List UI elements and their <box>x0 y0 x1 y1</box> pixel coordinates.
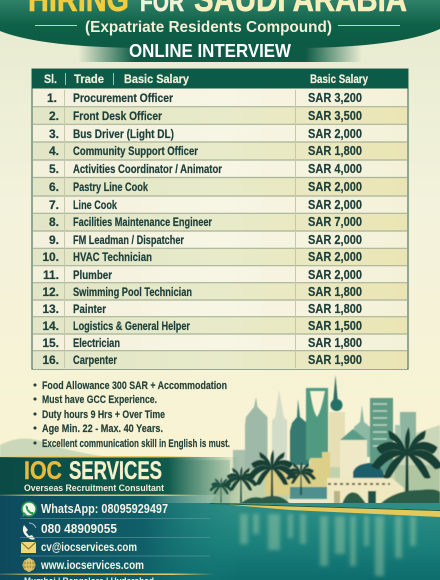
row 12 <box>42 284 362 299</box>
row 14 <box>42 318 362 333</box>
row 9 <box>49 232 362 247</box>
email row: cv@iocservices.com <box>41 540 137 554</box>
table header: Sl. <box>44 72 57 86</box>
row 8: 8. <box>49 215 59 229</box>
hazy hills <box>0 425 440 505</box>
row 16: Carpenter <box>73 353 117 367</box>
skyline illustration <box>0 375 440 510</box>
row 11: Plumber <box>73 268 112 282</box>
row 14: Logistics & General Helper <box>73 319 190 333</box>
yellow building <box>265 452 330 495</box>
requirement: duty hours: Duty hours 9 Hrs + Over Time <box>42 409 165 421</box>
row 5 <box>49 161 362 176</box>
company name <box>24 457 164 493</box>
row 15 <box>42 335 362 350</box>
row 14: 14. <box>42 319 59 333</box>
row 12: 12. <box>42 285 59 299</box>
palm trees <box>209 427 440 505</box>
row 3 <box>49 126 362 141</box>
bushes <box>240 489 440 506</box>
row 5: Activities Coordinator / Animator <box>73 162 222 176</box>
requirements list <box>34 380 230 450</box>
row 13: 13. <box>42 302 59 316</box>
row 5: 5. <box>49 162 59 176</box>
salary table <box>32 69 408 369</box>
row 6: Pastry Line Cook <box>73 180 148 194</box>
minaret tower <box>329 375 345 467</box>
company name: IOC <box>24 457 62 485</box>
row 16: 16. <box>42 353 59 367</box>
row 10: 10. <box>42 250 59 264</box>
row 6: SAR 2,000 <box>308 179 362 194</box>
table header <box>32 69 408 88</box>
right towers <box>354 398 416 473</box>
row 2: 2. <box>49 109 59 123</box>
row 10: SAR 2,000 <box>308 249 362 264</box>
requirement: english: Excellent communication skill in English is must. <box>42 438 230 450</box>
row 16 <box>42 352 362 367</box>
row 13 <box>42 301 362 316</box>
row 6 <box>49 179 362 194</box>
row 9: SAR 2,000 <box>308 232 362 247</box>
requirement: age: Age Min. 22 - Max. 40 Years. <box>42 423 163 435</box>
table header: Basic Salary <box>310 72 368 86</box>
row 11: 11. <box>43 268 59 282</box>
row 7 <box>49 197 362 212</box>
table header: Trade <box>74 72 104 86</box>
kingdom centre tower <box>306 388 328 460</box>
row 10: HVAC Technician <box>73 250 152 264</box>
row 2: SAR 3,500 <box>308 108 362 123</box>
row 4: Community Support Officer <box>73 144 198 158</box>
row 3: Bus Driver (Light DL) <box>73 127 174 141</box>
row 7: 7. <box>49 198 59 212</box>
row 4: SAR 1,800 <box>308 143 362 158</box>
company name: Overseas Recruitment Consultant <box>24 483 164 493</box>
domed building <box>340 429 367 480</box>
mosque <box>288 463 404 505</box>
row 6: 6. <box>49 180 59 194</box>
row 1: Procurement Officer <box>73 91 173 105</box>
row 12: Swimming Pool Technician <box>73 285 192 299</box>
row 9: FM Leadman / Dispatcher <box>73 233 184 247</box>
row 7: SAR 2,000 <box>308 197 362 212</box>
row 13: SAR 1,800 <box>308 301 362 316</box>
row 1: SAR 3,200 <box>308 90 362 105</box>
row 3: 3. <box>49 127 59 141</box>
online interview band <box>78 41 362 62</box>
row 2 <box>49 108 362 123</box>
row 10 <box>42 249 362 264</box>
whatsapp row: WhatsApp: 08095929497 <box>41 501 168 516</box>
company name: SERVICES <box>69 457 162 485</box>
requirement: food allowance: Food Allowance 300 SAR + Accommodation <box>42 380 227 392</box>
online interview band: ONLINE INTERVIEW <box>129 41 291 61</box>
row 4: 4. <box>49 144 59 158</box>
water and reflections <box>0 503 440 580</box>
row 16: SAR 1,900 <box>308 352 362 367</box>
row 8 <box>49 214 362 229</box>
row 13: Painter <box>73 302 106 316</box>
row 8: SAR 7,000 <box>308 214 362 229</box>
row 12: SAR 1,800 <box>308 284 362 299</box>
row 4 <box>49 143 362 158</box>
phone row <box>23 521 117 540</box>
website row: www.iocservices.com <box>40 558 144 572</box>
email row <box>21 540 137 554</box>
phone row: 080 48909055 <box>41 521 117 536</box>
row 1 <box>47 90 362 105</box>
requirement: GCC experience: Must have GCC Experience. <box>42 394 157 406</box>
row 15: SAR 1,800 <box>308 335 362 350</box>
row 3: SAR 2,000 <box>308 126 362 141</box>
row 9: 9. <box>49 233 59 247</box>
row 5: SAR 4,000 <box>308 161 362 176</box>
row 15: 15. <box>42 336 59 350</box>
subtitle: (Expatriate Residents Compound) <box>85 19 332 36</box>
row 1: 1. <box>47 91 57 105</box>
title: hiring for Saudi Arabia <box>28 0 407 19</box>
row 11: SAR 2,000 <box>308 267 362 282</box>
table header: Basic Salary <box>124 72 189 86</box>
row 15: Electrician <box>73 336 120 350</box>
row 8: Facilities Maintenance Engineer <box>73 215 212 229</box>
far towers <box>233 390 309 475</box>
header: curved green banner <box>0 0 440 49</box>
row 2: Front Desk Officer <box>73 109 162 123</box>
row 11 <box>43 267 362 282</box>
row 7: Line Cook <box>73 198 117 212</box>
contact panel <box>0 456 240 580</box>
row 14: SAR 1,500 <box>308 318 362 333</box>
